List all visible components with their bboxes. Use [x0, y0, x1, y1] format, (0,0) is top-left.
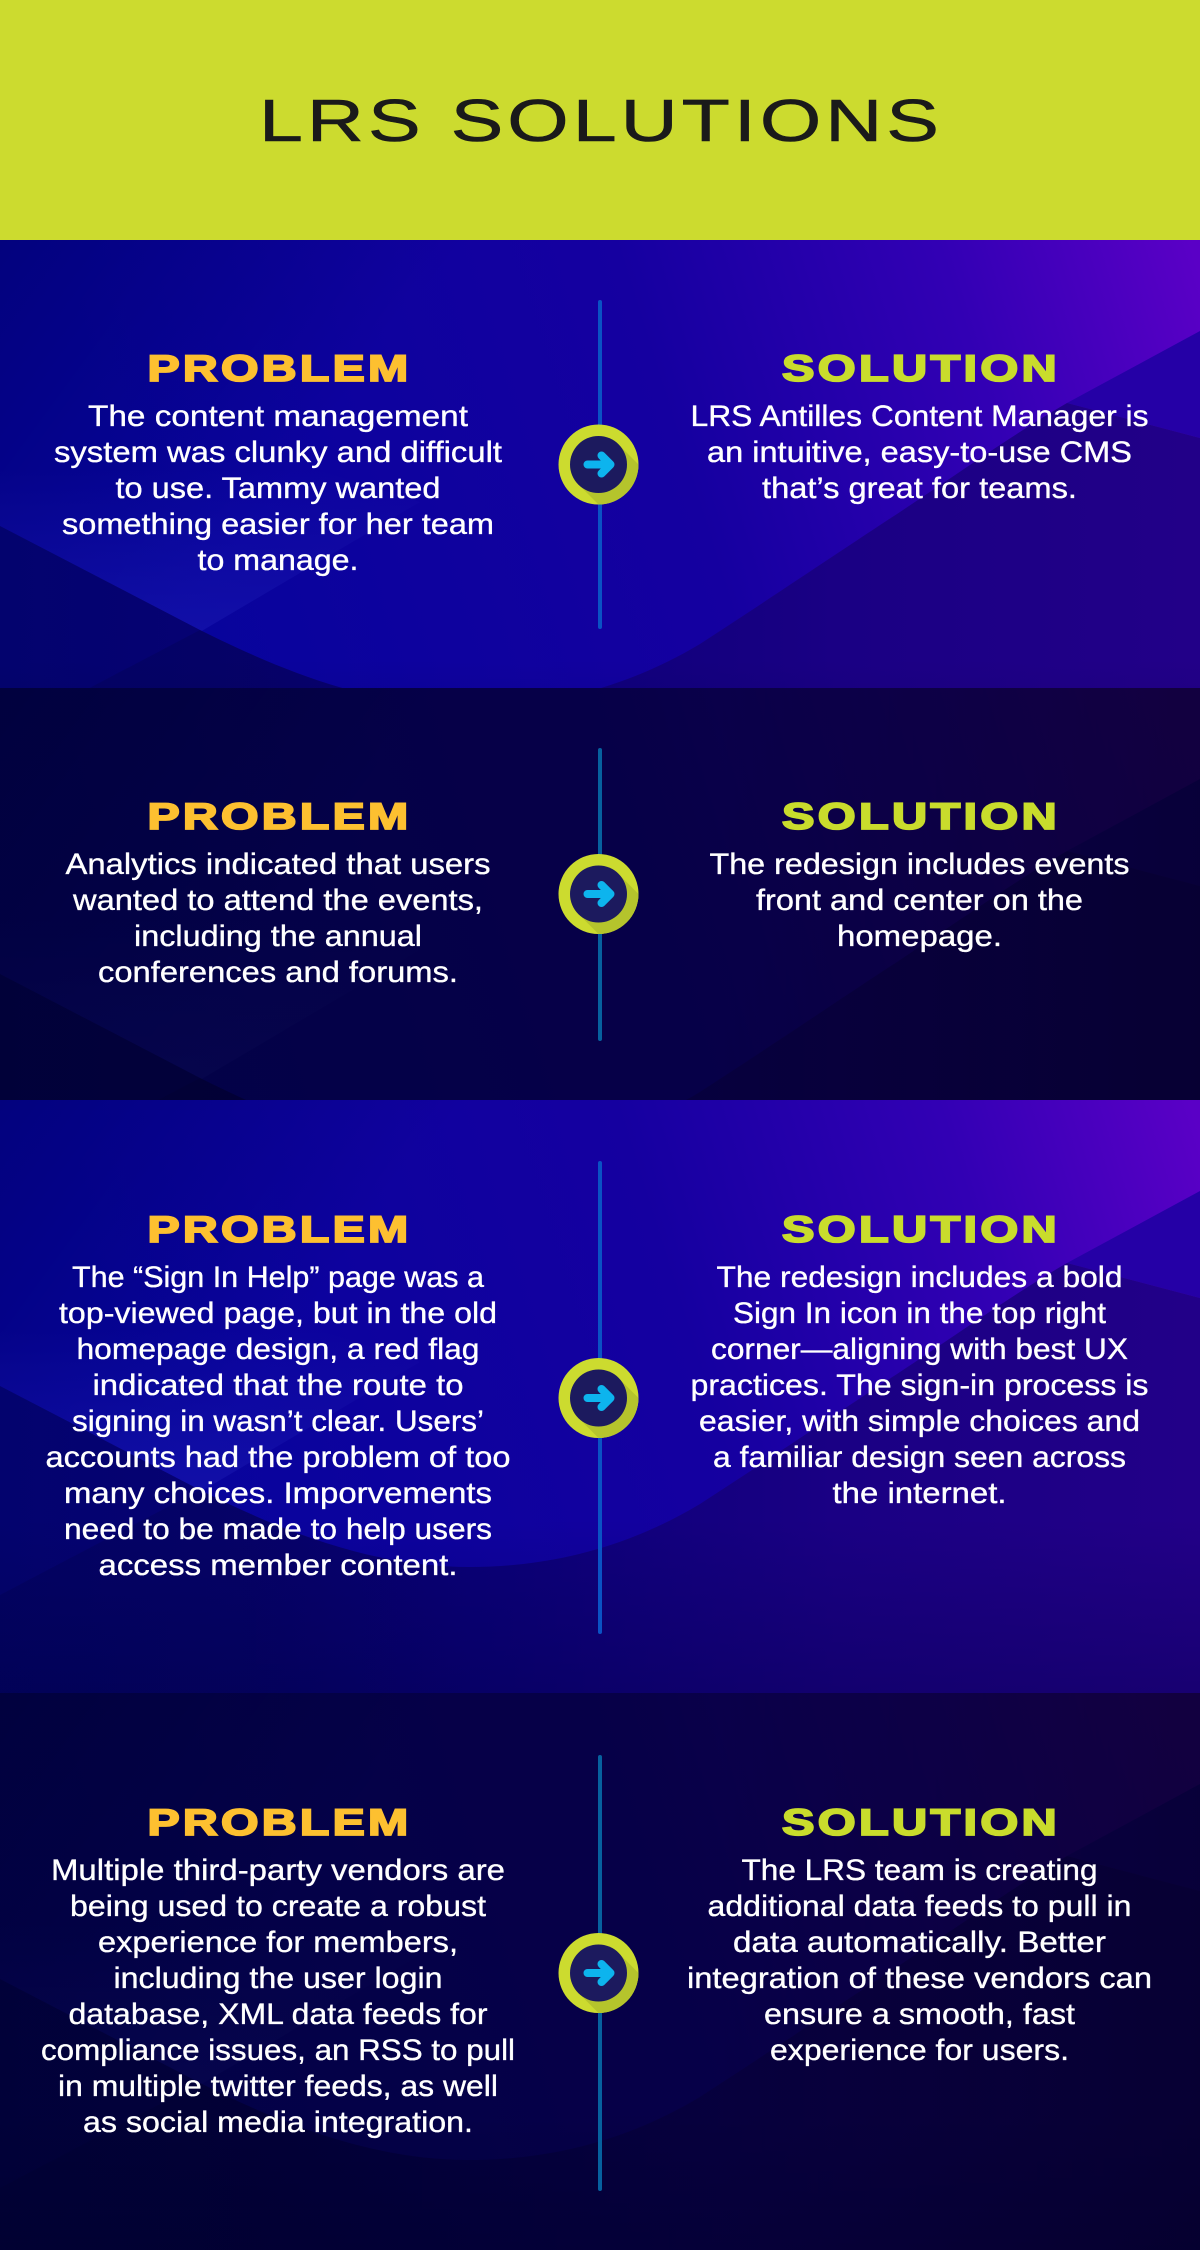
problem text: including the user login [114, 1962, 442, 1995]
problem text: Analytics indicated that users [66, 848, 490, 881]
problem text: conferences and forums. [98, 956, 458, 989]
problem text: system was clunky and difficult [54, 436, 503, 469]
solution text: corner—aligning with best UX [711, 1333, 1128, 1366]
solution text: the internet. [832, 1477, 1006, 1510]
icon: arrow badge [558, 1933, 638, 2013]
problem text: to manage. [198, 544, 358, 577]
problem text: accounts had the problem of too [46, 1441, 510, 1474]
problem text: The “Sign In Help” page was a [72, 1261, 484, 1294]
panel: sign in [0, 1100, 1200, 1693]
icon: arrow badge [558, 854, 638, 934]
problem text: signing in wasn’t clear. Users’ [72, 1405, 484, 1438]
solution text: integration of these vendors can [687, 1962, 1152, 1995]
problem text: access member content. [98, 1549, 458, 1582]
problem heading: PROBLEM [148, 348, 412, 389]
title: LRS SOLUTIONS [259, 88, 943, 154]
problem text: to use. Tammy wanted [116, 472, 441, 505]
problem text: experience for members, [98, 1926, 458, 1959]
solution text [690, 1261, 1148, 1510]
problem text: as social media integration. [83, 2106, 473, 2139]
problem heading: PROBLEM [148, 1209, 412, 1250]
problem text: compliance issues, an RSS to pull [41, 2034, 515, 2067]
problem text [66, 848, 490, 989]
solution heading: SOLUTION [782, 1209, 1060, 1250]
panel: content management [0, 240, 1200, 688]
solution text: practices. The sign-in process is [690, 1369, 1148, 1402]
solution text: The redesign includes a bold [716, 1261, 1122, 1294]
solution text: data automatically. Better [733, 1926, 1106, 1959]
problem text: being used to create a robust [70, 1890, 487, 1923]
solution text [690, 400, 1148, 505]
solution text: that’s great for teams. [762, 472, 1077, 505]
problem text: in multiple twitter feeds, as well [58, 2070, 498, 2103]
problem text: wanted to attend the events, [72, 884, 483, 917]
problem text: homepage design, a red flag [76, 1333, 480, 1366]
icon: arrow badge [558, 1358, 638, 1438]
problem text: need to be made to help users [64, 1513, 492, 1546]
solution text: ensure a smooth, fast [764, 1998, 1076, 2031]
problem text [46, 1261, 510, 1582]
title banner [0, 0, 1200, 240]
panel background [0, 688, 1200, 1100]
solution text [687, 1854, 1152, 2067]
solution text: Sign In icon in the top right [733, 1297, 1107, 1330]
problem text [41, 1854, 515, 2139]
problem text: including the annual [134, 920, 422, 953]
divider line [598, 300, 602, 629]
divider line [598, 1161, 602, 1634]
solution text: experience for users. [770, 2034, 1069, 2067]
problem text: many choices. Imporvements [64, 1477, 492, 1510]
problem text: database, XML data feeds for [68, 1998, 488, 2031]
panel: events [0, 688, 1200, 1100]
problem heading: PROBLEM [148, 1802, 412, 1843]
problem text: Multiple third-party vendors are [51, 1854, 505, 1887]
solution text: front and center on the [756, 884, 1083, 917]
solution heading: SOLUTION [782, 1802, 1060, 1843]
problem text [54, 400, 503, 577]
divider line [598, 1755, 602, 2191]
solution heading: SOLUTION [782, 796, 1060, 837]
solution text: LRS Antilles Content Manager is [690, 400, 1148, 433]
solution text: easier, with simple choices and [699, 1405, 1140, 1438]
panel background [0, 1100, 1200, 1693]
solution text: homepage. [837, 920, 1002, 953]
solution text [710, 848, 1130, 953]
solution text: The redesign includes events [710, 848, 1130, 881]
problem text: The content management [88, 400, 469, 433]
solution text: The LRS team is creating [742, 1854, 1098, 1887]
solution heading: SOLUTION [782, 348, 1060, 389]
panel background [0, 1693, 1200, 2250]
panel: third-party vendors [0, 1693, 1200, 2250]
solution text: a familiar design seen across [713, 1441, 1126, 1474]
solution text: an intuitive, easy-to-use CMS [707, 436, 1132, 469]
icon: arrow badge [558, 424, 638, 504]
panel background [0, 240, 1200, 688]
divider line [598, 748, 602, 1041]
problem text: top-viewed page, but in the old [59, 1297, 497, 1330]
solution text: additional data feeds to pull in [708, 1890, 1132, 1923]
problem text: indicated that the route to [92, 1369, 464, 1402]
problem heading: PROBLEM [148, 796, 412, 837]
problem text: something easier for her team [62, 508, 494, 541]
